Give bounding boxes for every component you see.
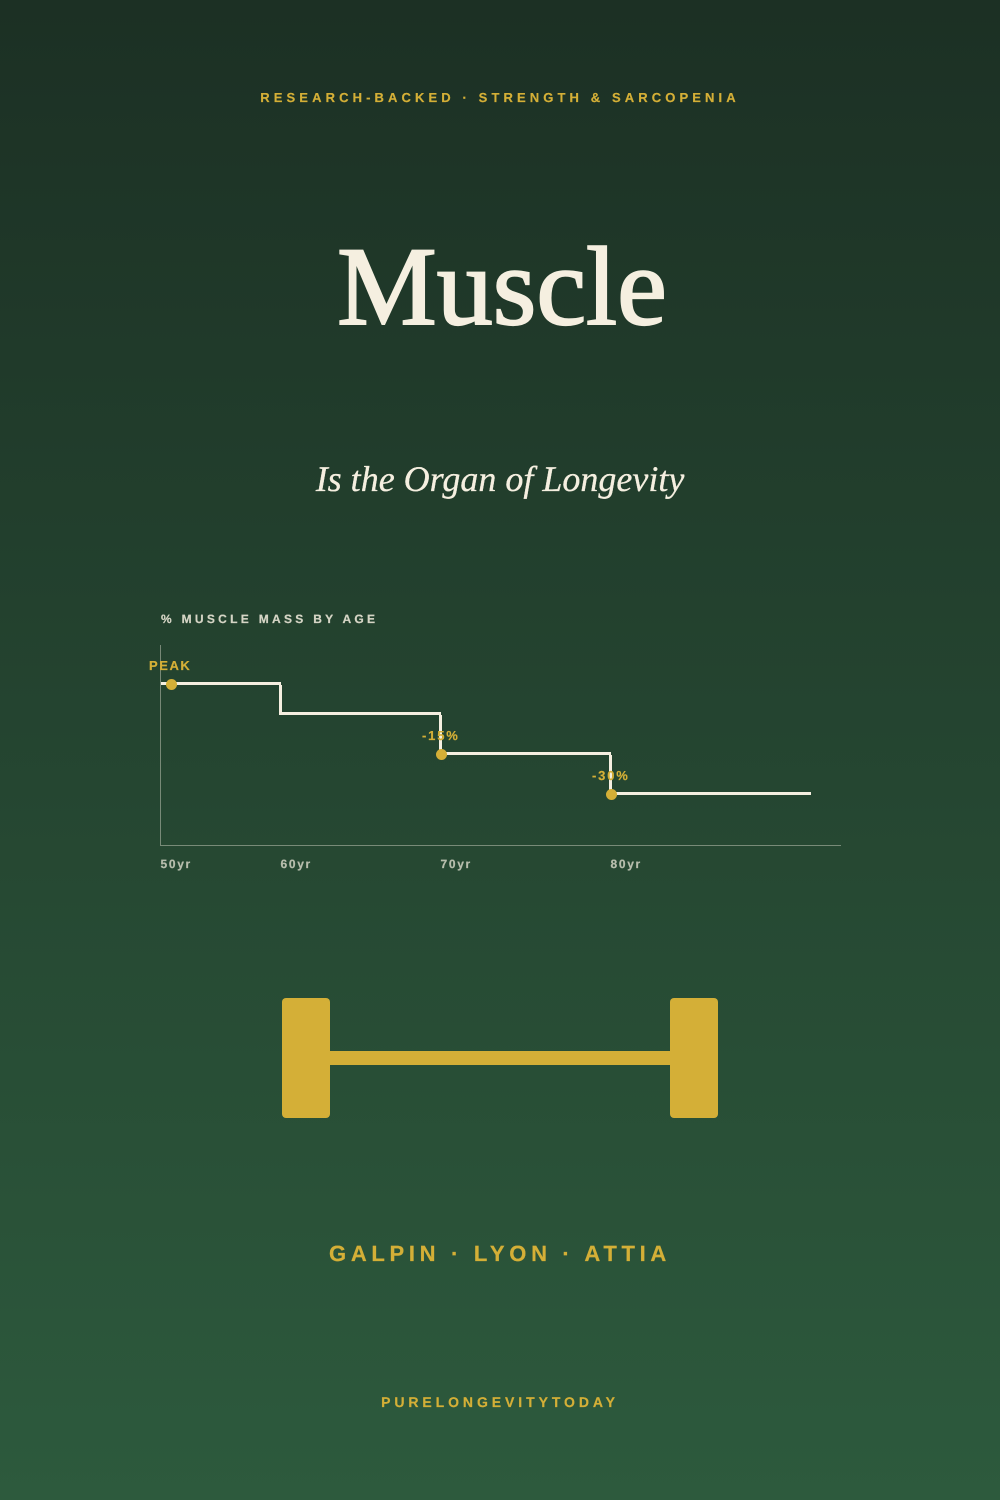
eyebrow label: RESEARCH-BACKED · STRENGTH & SARCOPENIA (260, 90, 740, 105)
barbell left plate (282, 998, 330, 1118)
label: minus 30 percent: -30% (592, 768, 630, 783)
barbell bar (330, 1051, 670, 1065)
data point: minus 15 percent (436, 749, 447, 760)
label: peak: PEAK (149, 658, 191, 673)
barbell right plate (670, 998, 718, 1118)
x-axis label: 60yr: 60yr (280, 857, 312, 871)
x-axis label: 80yr: 80yr (610, 857, 642, 871)
chart axes (160, 645, 841, 846)
stepped decline line (161, 682, 811, 795)
x-axis label: 50yr: 50yr (160, 857, 192, 871)
subtitle: Is the Organ of Longevity (316, 459, 684, 499)
data point: minus 30 percent (606, 789, 617, 800)
chart heading: % MUSCLE MASS BY AGE (161, 612, 378, 626)
footer brand: PURELONGEVITYTODAY (381, 1394, 619, 1410)
researcher names: GALPIN · LYON · ATTIA (329, 1241, 671, 1266)
data point: peak (166, 679, 177, 690)
icon: barbell (282, 998, 718, 1118)
label: minus 15 percent: -15% (422, 728, 460, 743)
title: Muscle (337, 225, 667, 349)
step chart: muscle mass by age (149, 645, 841, 871)
x-axis label: 70yr: 70yr (440, 857, 472, 871)
